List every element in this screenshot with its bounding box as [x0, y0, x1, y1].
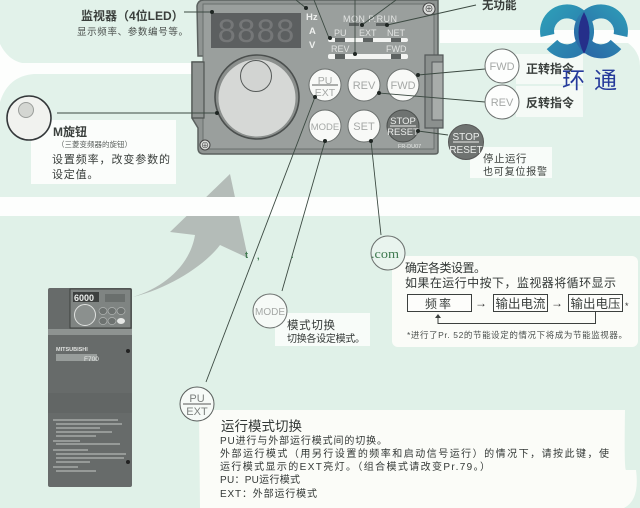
- text block: M dial description: 设定值。: [52, 167, 99, 181]
- brand labels: [56, 347, 99, 363]
- text block: M dial description: [31, 120, 176, 184]
- button: PU/EXT: PU: [318, 75, 332, 87]
- text block: stop description: 也可复位报警: [483, 165, 547, 178]
- button: PU/EXT: EXT: [315, 87, 336, 99]
- unit labels: Hz: [306, 12, 318, 23]
- icon: STOP/RESET circle: [448, 124, 484, 160]
- text block: monitor label: 监视器（4位LED）: [81, 8, 184, 23]
- icon: STOP/RESET circle: STOP: [452, 132, 480, 143]
- icon: MODE circle: [253, 294, 287, 328]
- icon: FWD circle: FWD: [489, 61, 515, 73]
- icon: REV circle: 反转指令: [526, 95, 574, 110]
- icon: PU/EXT circle: [180, 387, 214, 421]
- button: REV: [348, 69, 380, 101]
- button: STOP/RESET: [387, 110, 419, 142]
- icon: FWD circle: [485, 49, 583, 84]
- text block: run mode description: 运行模式显示的EXT亮灯。（组合模式请改变Pr.79。）: [220, 460, 490, 473]
- flow: monitor cycle: 输出电流: [495, 296, 546, 311]
- watermark: stray marks: t: [245, 250, 248, 260]
- warning text lines: [53, 420, 126, 471]
- logo text: [562, 67, 617, 93]
- clip: left side: [192, 62, 204, 118]
- text block: run mode description: 运行模式切换: [221, 419, 302, 434]
- icon: STOP/RESET circle: RESET: [449, 145, 483, 156]
- button: STOP/RESET: RESET: [387, 127, 419, 138]
- button: STOP/RESET: STOP: [390, 116, 416, 127]
- brand labels: MITSUBISHI: [56, 347, 88, 353]
- text block: stop description: 停止运行: [483, 152, 527, 165]
- status labels: PU: [334, 28, 347, 38]
- icon: FWD circle: 正转指令: [526, 61, 574, 76]
- flow: monitor cycle: [408, 294, 629, 324]
- text block: M dial description: （三菱变频器的旋钮）: [57, 139, 132, 149]
- panel: top background: [0, 0, 640, 197]
- unit labels: A: [309, 26, 316, 37]
- button: MODE: [309, 110, 341, 142]
- status labels: REV: [331, 44, 350, 54]
- text block: run mode description: PU：PU运行模式: [220, 473, 300, 486]
- text block: run mode description: [199, 410, 637, 508]
- text block: SET description: *进行了Pr. 52的节能设定的情况下将成为节能监视器。: [407, 330, 627, 340]
- arrow: grey curved arrow from inverter to panel: [133, 174, 248, 297]
- flow: monitor cycle: 输出电压: [570, 296, 621, 311]
- icon: SET circle with stray text: [371, 236, 405, 270]
- text block: MODE description: [275, 313, 370, 346]
- text block: run mode description: 外部运行模式（用另行设置的频率和启动信号运行）的情况下，请按此键，使: [220, 447, 609, 460]
- icon: REV circle: [485, 85, 583, 119]
- icon: PU/EXT circle: PU: [189, 393, 205, 405]
- icon: PU/EXT circle: EXT: [186, 406, 208, 418]
- button: FWD: FWD: [390, 80, 416, 92]
- text block: MODE description: 模式切换: [287, 318, 336, 332]
- unit labels: V: [309, 40, 316, 51]
- icon: M dial: [7, 96, 51, 140]
- text block: SET description: 确定各类设置。: [405, 260, 486, 275]
- watermark: stray marks: .: [291, 250, 294, 260]
- brand labels: F700: [84, 356, 99, 363]
- flow: monitor cycle: 频率: [425, 296, 453, 311]
- text block: MODE description: 切换各设定模式。: [287, 332, 365, 345]
- status labels: EXT: [359, 28, 377, 38]
- flow: monitor cycle: *: [625, 301, 629, 311]
- button: FWD: [387, 69, 419, 101]
- button: MODE: MODE: [311, 122, 339, 133]
- mini operation panel: 6000: [74, 293, 94, 303]
- logo: Huantong rings: [547, 11, 621, 93]
- text block: monitor label: 显示频率、参数编号等。: [77, 26, 188, 38]
- panel: bottom background: [0, 216, 640, 508]
- mini operation panel: [70, 289, 131, 328]
- panel: operation panel: [192, 0, 443, 154]
- status labels: FWD: [386, 44, 407, 54]
- watermark: stray marks: ,: [257, 251, 260, 261]
- unit labels: [306, 12, 318, 51]
- dial: [215, 55, 299, 139]
- button: REV: REV: [353, 80, 376, 92]
- clip: right side: [425, 55, 443, 128]
- text block: SET description: [392, 256, 638, 347]
- status labels: MON P.RUN: [343, 14, 397, 24]
- text: no function: 无功能: [482, 0, 517, 12]
- screw: top right: ⊕: [424, 4, 434, 14]
- watermark: stray marks: [245, 250, 294, 261]
- flow: monitor cycle: →: [475, 296, 487, 310]
- leader lines: [57, 0, 485, 382]
- text block: SET description: 如果在运行中按下，监视器将循环显示: [405, 275, 616, 290]
- text block: M dial description: M旋钮: [53, 124, 87, 139]
- text block: M dial description: 设置频率，改变参数的: [52, 152, 170, 166]
- screw: bottom left: ⊕: [201, 141, 209, 150]
- logo text: 通: [594, 67, 617, 93]
- text block: stop description: [470, 147, 552, 178]
- logo text: 环: [562, 67, 585, 93]
- indicator strips: [328, 23, 408, 59]
- icon: SET circle with stray text: .com: [371, 246, 399, 261]
- button: SET: [348, 110, 380, 142]
- model label: FR-DU07: [398, 144, 421, 150]
- icon: MODE circle: MODE: [255, 307, 285, 318]
- illustration: inverter unit: [48, 288, 132, 487]
- icon: REV circle: REV: [491, 97, 514, 109]
- text block: run mode description: EXT：外部运行模式: [220, 487, 317, 500]
- flow: monitor cycle: →: [551, 296, 563, 310]
- LED display: 8888: [217, 15, 295, 53]
- text block: run mode description: PU进行与外部运行模式间的切换。: [220, 434, 387, 447]
- anchor dots: [210, 6, 420, 143]
- text block: monitor label: [77, 8, 188, 38]
- status labels: [331, 14, 407, 54]
- screw: top right: [423, 3, 435, 15]
- status labels: NET: [387, 28, 406, 38]
- button: SET: SET: [353, 121, 375, 133]
- button: PU/EXT: [309, 69, 341, 101]
